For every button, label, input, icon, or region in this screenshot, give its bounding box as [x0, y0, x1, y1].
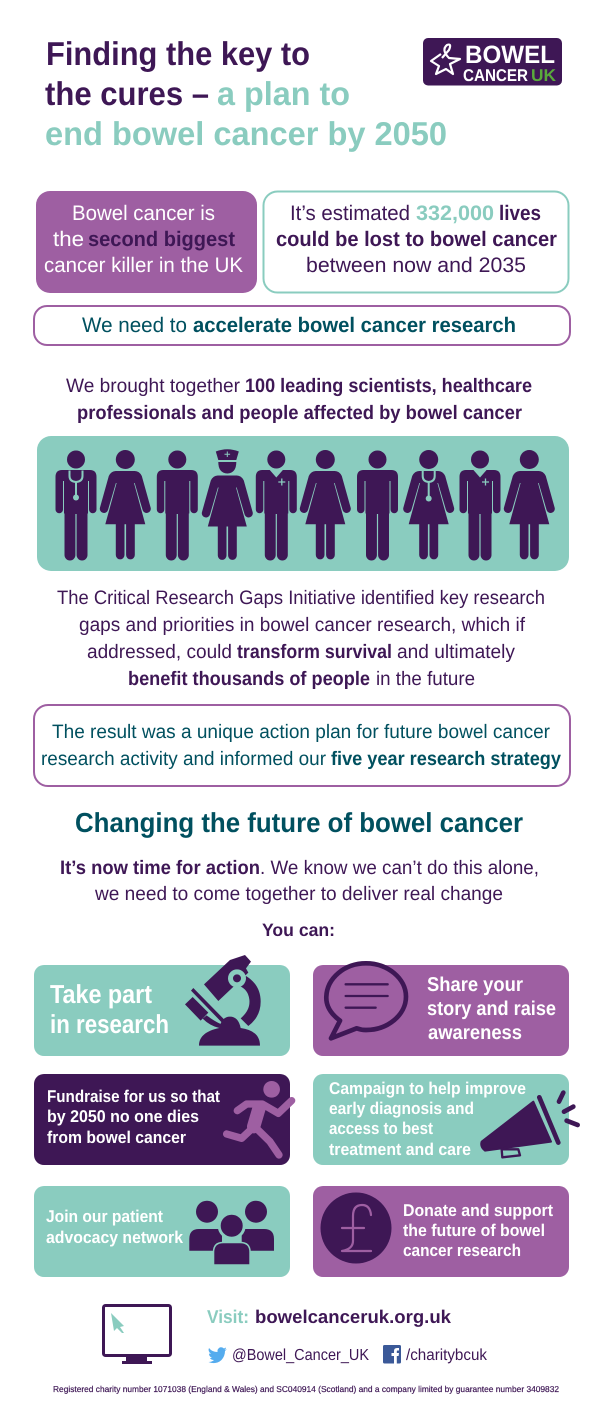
icon: doctor man	[56, 450, 96, 560]
text block: initiative description: in the future	[376, 668, 475, 690]
card: fundraise: by 2050 no one dies	[47, 1107, 199, 1126]
card: campaign: access to best	[329, 1119, 433, 1138]
social: facebook: /charitybcuk	[406, 1347, 488, 1364]
card: campaign: treatment and care	[329, 1140, 471, 1159]
card: take part in research	[34, 955, 290, 1056]
icon: megaphone	[481, 1093, 578, 1157]
text block: initiative description: and ultimately	[397, 641, 515, 663]
card: donate: Donate and support	[403, 1201, 553, 1220]
panel: accelerate research: We need to	[82, 314, 187, 337]
card: fundraise: Fundraise for us so that	[47, 1087, 220, 1106]
icon: scrubs man	[256, 450, 297, 560]
card: join network: Join our patient	[46, 1207, 163, 1226]
icon: nurse	[202, 449, 253, 560]
text block: initiative description	[57, 587, 545, 690]
panel: second biggest killer: second biggest	[88, 228, 235, 251]
title: Finding the key to	[46, 35, 310, 72]
card: fundraise	[34, 1074, 292, 1165]
card: campaign: Campaign to help improve	[329, 1079, 526, 1098]
card: donate	[313, 1186, 569, 1277]
text: website: Visit:	[207, 1306, 249, 1327]
logo: Bowel Cancer UK	[423, 38, 562, 86]
icon: speech bubble	[326, 963, 406, 1038]
icon: woman	[300, 450, 351, 559]
panel: lives lost estimate: It’s estimated	[290, 202, 410, 225]
panel: second biggest killer: cancer killer in the UK	[44, 254, 243, 277]
title: the cures –	[45, 75, 209, 112]
card: share your story: Share your	[427, 974, 523, 996]
icon: woman	[504, 450, 555, 559]
icon: woman	[100, 450, 151, 559]
icon: doctor woman	[403, 450, 454, 559]
title: end bowel cancer by 2050	[45, 115, 447, 152]
panel: people figures	[37, 436, 569, 571]
panel: second biggest killer: Bowel cancer is	[72, 202, 215, 225]
card: share your story: awareness	[428, 1022, 522, 1044]
text block: time for action: . We know we can’t do this alone,	[260, 857, 539, 879]
logo: Bowel Cancer UK: UK	[531, 66, 557, 85]
logo: Bowel Cancer UK: CANCER	[463, 66, 528, 85]
panel: accelerate research: accelerate bowel cancer research	[193, 314, 516, 337]
card: take part in research: Take part	[50, 979, 152, 1009]
card: share your story: story and raise	[427, 998, 556, 1020]
card: donate: cancer research	[403, 1241, 521, 1260]
logo: Bowel Cancer UK: BOWEL	[465, 41, 555, 69]
panel: lives lost estimate: could be lost to bowel cancer	[276, 228, 557, 251]
title: a plan to	[217, 75, 350, 112]
panel: lives lost estimate: lives	[499, 202, 541, 225]
icon: microscope	[185, 955, 261, 1046]
icon: computer monitor	[104, 1306, 170, 1364]
text: website: bowelcanceruk.org.uk	[255, 1306, 452, 1327]
text block: time for action: we need to come together to deliver real change	[94, 883, 503, 905]
panel: action plan result: The result was a unique action plan for future bowel cancer	[52, 721, 550, 743]
text block: initiative description: addressed, could	[87, 641, 232, 663]
text block: initiative description: benefit thousands of people	[128, 668, 370, 690]
card: donate: the future of bowel	[403, 1221, 545, 1240]
panel: action plan result: five year research strategy	[331, 748, 561, 770]
panel: lives lost estimate: between now and 2035	[306, 254, 526, 277]
text: you can: You can:	[262, 920, 335, 940]
text: charity registration: Registered charity number 1071038 (England & Wales) and SC040914 (Scotland) and a company limited by guarantee number 3409832	[53, 1384, 559, 1394]
card: campaign	[313, 1074, 578, 1165]
icon: man	[357, 450, 398, 560]
title	[45, 35, 447, 152]
card: campaign: early diagnosis and	[329, 1099, 474, 1118]
heading: changing the future: Changing the future of bowel cancer	[75, 807, 523, 838]
text block: brought together: professionals and people affected by bowel cancer	[77, 402, 522, 424]
icon: scrubs man	[460, 450, 500, 560]
card: fundraise: from bowel cancer	[47, 1128, 186, 1147]
social: facebook	[383, 1345, 488, 1364]
icon: runner	[227, 1081, 292, 1155]
card: join network	[34, 1186, 290, 1277]
panel: accelerate research	[34, 306, 570, 345]
panel: action plan result: research activity and informed our	[41, 748, 326, 770]
text block: time for action	[60, 857, 539, 905]
text block: brought together: We brought together	[66, 375, 240, 397]
icon: man	[157, 450, 198, 560]
panel: lives lost estimate	[264, 192, 568, 292]
panel: lives lost estimate: 332,000	[416, 202, 494, 225]
text block: initiative description: transform survival	[237, 641, 392, 663]
text block: initiative description: gaps and priorities in bowel cancer research, which if	[79, 614, 526, 636]
social: twitter: @Bowel_Cancer_UK	[232, 1347, 369, 1364]
card: join network: advocacy network	[46, 1228, 183, 1247]
panel: second biggest killer: the	[53, 228, 84, 251]
card: take part in research: in research	[50, 1009, 169, 1039]
text block: time for action: It’s now time for action	[60, 857, 260, 879]
card: share your story	[313, 963, 569, 1056]
icon: pound coin	[320, 1192, 392, 1264]
text block: brought together	[66, 375, 532, 424]
text block: initiative description: The Critical Research Gaps Initiative identified key research	[57, 587, 545, 609]
panel: action plan result	[34, 705, 570, 786]
icon: people group	[189, 1201, 274, 1266]
text block: brought together: 100 leading scientists, healthcare	[245, 375, 532, 397]
panel: second biggest killer	[36, 191, 257, 293]
